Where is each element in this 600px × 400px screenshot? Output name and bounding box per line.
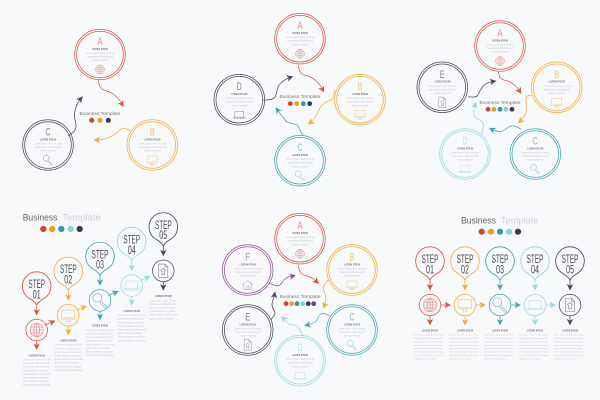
circle C: C	[298, 142, 303, 154]
circle A: A	[298, 20, 303, 32]
arrow A to B	[498, 72, 520, 91]
circle F	[222, 245, 273, 295]
step 05: sed do eiusmod tempor ut	[149, 306, 176, 310]
circle A: Lorem ipsum dolor sit amet	[286, 236, 314, 239]
step 03	[86, 242, 116, 357]
step 03: 03	[496, 264, 504, 276]
step 04: Lorem ipsum dolor sit amet consect	[519, 334, 549, 337]
step 04: nisi ut aliquip ex ea commodo cons	[519, 351, 548, 354]
step 02: Lorem ipsum dolor sit amet	[54, 344, 82, 347]
step 01: STEP	[422, 254, 439, 266]
step 02: quis nostrud exercitation	[54, 362, 80, 365]
step 05: 05	[159, 230, 167, 242]
colour dots	[288, 101, 312, 106]
circle B: Lorem ipsum dolor sit amet	[138, 142, 167, 146]
circle B	[531, 62, 582, 113]
circle A: consectetur adipiscing elit	[287, 40, 314, 43]
circle A	[275, 213, 325, 264]
title: Business	[461, 216, 496, 226]
circle A	[275, 13, 325, 64]
circle B: consectetur adipiscing elit	[544, 88, 570, 91]
step 04: STEP	[527, 254, 544, 266]
circle D: sed do eiusmod	[292, 366, 309, 368]
circle A: consectetur adipiscing elit	[87, 56, 114, 58]
step 01: LOREM IPSUM	[422, 330, 438, 332]
step 03: LOREM IPSUM	[92, 326, 108, 328]
circle F: Lorem ipsum dolor sit amet	[234, 268, 262, 270]
panel: three-step cycle	[23, 29, 178, 170]
step 01: magna aliqua ut enim minim	[23, 373, 52, 376]
circle C: consectetur adipiscing elit	[35, 146, 62, 149]
arrow F to A	[269, 276, 292, 286]
title	[23, 213, 101, 224]
circle A: A	[498, 28, 503, 40]
circle D	[214, 74, 265, 125]
circle C: Lorem ipsum dolor sit amet	[338, 328, 366, 330]
step 03: Lorem ipsum dolor sit amet	[86, 329, 114, 332]
step 04: 04	[531, 264, 539, 276]
circle C: LOREM IPSUM	[292, 155, 308, 157]
step 04: LOREM IPSUM	[124, 311, 140, 313]
step 05: quis nostrud exercitation	[149, 317, 175, 320]
title: Template	[62, 213, 101, 224]
circle C: sed do eiusmod	[344, 336, 361, 338]
step 02: voluptate velit esse cillum	[449, 357, 471, 360]
step 01: Lorem ipsum dolor sit amet consect	[414, 334, 444, 337]
step 03: nostrud exercitation ullamco labori	[484, 347, 513, 350]
step 04: aliqua ut enim ad minim veniam qu	[519, 344, 548, 347]
circle D	[440, 129, 490, 179]
arrow D to A	[263, 78, 290, 100]
step 04: LOREM IPSUM	[527, 330, 543, 332]
colour dots	[479, 229, 521, 235]
step 01: Lorem ipsum dolor sit amet	[23, 358, 51, 362]
circle C: C	[533, 136, 538, 148]
step 04: duis aute irure dolor in reprehende	[519, 354, 548, 357]
step 03: consectetur adipiscing elit	[86, 332, 113, 335]
panel: five-step cycle	[417, 21, 582, 179]
circle A: consectetur adipiscing elit	[487, 47, 514, 50]
arrow C to A	[68, 99, 80, 136]
step 05: nisi ut aliquip ex ea commodo cons	[554, 351, 583, 354]
title: Business Template	[280, 94, 321, 99]
step 02: sed do eiusmod tempor ut	[54, 351, 81, 354]
circle D: LOREM IPSUM	[231, 94, 247, 96]
step 02	[449, 247, 482, 360]
step 04: ullamco laboris nisi aliquip	[118, 336, 145, 339]
circle E	[417, 62, 468, 113]
step 01	[414, 247, 448, 360]
circle E: Lorem ipsum dolor sit amet	[428, 85, 457, 88]
step 05: voluptate velit esse cillum	[554, 357, 576, 360]
step 03: STEP	[92, 249, 109, 261]
circle D	[275, 335, 325, 386]
circle B: sed do eiusmod	[344, 276, 361, 278]
step 01: ullamco laboris nisi aliquip	[23, 380, 50, 383]
step 02: Lorem ipsum dolor sit amet consect	[449, 334, 479, 337]
step 04	[117, 227, 147, 342]
step 02: ex ea commodo consequat	[54, 369, 82, 372]
step 05: STEP	[155, 220, 172, 232]
step 04: sed do eiusmod tempor ut	[118, 321, 145, 324]
arrow A to B	[298, 265, 316, 282]
circle A: LOREM IPSUM	[292, 233, 308, 235]
circle C: C	[46, 126, 51, 138]
step 01: duis aute irure dolor in reprehende	[414, 354, 443, 357]
step 02: aliqua ut enim ad minim veniam qu	[449, 344, 478, 347]
step 02: nisi ut aliquip ex ea commodo cons	[449, 351, 478, 354]
arrow A to B	[298, 65, 322, 90]
step 05: Lorem ipsum dolor sit amet consect	[554, 334, 584, 337]
circle C: Lorem ipsum dolor sit amet	[286, 158, 314, 161]
circle D: D	[462, 136, 468, 148]
step 03: ullamco laboris nisi aliquip	[86, 350, 113, 353]
circle E: LOREM IPSUM	[240, 324, 256, 326]
circle B: B	[554, 69, 559, 81]
circle D: D	[298, 342, 303, 354]
colour dots	[486, 107, 514, 112]
circle C	[327, 305, 377, 355]
step 01: consectetur adipiscing elit	[23, 362, 49, 365]
step 03: incididunt ut labore et dolore magn	[484, 340, 513, 343]
circle D: Lorem ipsum dolor sit amet	[451, 152, 479, 154]
step 01: aliqua ut enim ad minim veniam qu	[414, 344, 443, 347]
step 04: quis nostrud exercitation	[118, 332, 143, 335]
circle A: sed do eiusmod	[292, 244, 309, 246]
step 04: adipiscing elit sed do eiusmod tem	[519, 337, 548, 340]
step 03: Lorem ipsum dolor sit amet consect	[484, 334, 514, 337]
arrow B to C	[97, 128, 131, 140]
circle A: consectetur adipiscing elit	[287, 240, 314, 243]
circle E	[222, 305, 273, 355]
step 01: incididunt labore et dolore	[23, 369, 50, 372]
panel: four-step cycle	[214, 13, 385, 186]
step 03: voluptate velit esse cillum	[484, 357, 506, 360]
circle D: consectetur adipiscing elit	[452, 155, 479, 158]
step 05: LOREM IPSUM	[562, 330, 578, 332]
circle B: LOREM IPSUM	[352, 94, 368, 96]
circle B: sed do eiusmod	[144, 151, 161, 153]
circle A: LOREM IPSUM	[492, 40, 508, 42]
circle B: sed do eiusmod	[549, 93, 566, 95]
step 02: STEP	[60, 264, 77, 276]
arrow B to C	[310, 90, 335, 122]
circle D: consectetur adipiscing elit	[226, 101, 253, 104]
circle B: consectetur adipiscing elit	[139, 146, 166, 149]
step 02: nostrud exercitation ullamco labori	[449, 347, 478, 350]
step 01: 01	[426, 264, 434, 276]
step 03: magna aliqua ut enim minim	[86, 343, 115, 346]
step 05: LOREM IPSUM	[155, 296, 171, 298]
circle A: A	[298, 220, 303, 232]
panel: horizontal five-step timeline	[414, 216, 584, 360]
step 04: magna aliqua ut enim minim	[118, 329, 147, 332]
circle C: Lorem ipsum dolor sit amet	[521, 152, 550, 154]
circle C: consectetur adipiscing elit	[522, 155, 549, 158]
circle A	[75, 29, 125, 80]
step 02: 02	[64, 275, 72, 287]
circle C: sed do eiusmod	[292, 166, 309, 168]
step 05: Lorem ipsum dolor sit amet	[149, 299, 177, 302]
step 01: nostrud exercitation ullamco labori	[414, 347, 443, 350]
circle C	[510, 129, 561, 179]
step 03: ex ea commodo consequat	[86, 354, 114, 357]
step 03: sed do eiusmod tempor ut	[86, 336, 113, 339]
arrow C to D	[492, 126, 522, 132]
step 04: Lorem ipsum dolor sit amet	[118, 314, 146, 317]
step 03: 03	[96, 260, 104, 272]
step 01	[22, 272, 52, 387]
circle A: sed do eiusmod	[292, 44, 309, 46]
step 02: duis aute irure dolor in reprehende	[449, 354, 478, 357]
circle A: sed do eiusmod	[492, 52, 509, 54]
step 04: consectetur adipiscing elit	[118, 318, 144, 321]
title: Template	[501, 216, 538, 226]
step 01: incididunt ut labore et dolore magn	[414, 340, 443, 343]
circle B	[127, 120, 178, 170]
circle B: sed do eiusmod	[352, 105, 369, 107]
step 02: consectetur adipiscing elit	[54, 347, 81, 350]
step 03: LOREM IPSUM	[492, 330, 508, 332]
circle B: consectetur adipiscing elit	[347, 101, 374, 104]
step 02: incididunt labore et dolore	[54, 355, 81, 358]
step 03: duis aute irure dolor in reprehende	[484, 354, 513, 357]
step 03: aliqua ut enim ad minim veniam qu	[484, 344, 513, 347]
circle E: Lorem ipsum dolor sit amet	[234, 328, 262, 330]
arrow B to C	[323, 280, 328, 306]
step 02: 02	[461, 264, 469, 276]
title: Business Template	[80, 111, 121, 116]
circle C: LOREM IPSUM	[527, 148, 543, 150]
step 05: 05	[566, 264, 574, 276]
circle C: LOREM IPSUM	[40, 139, 56, 141]
circle C: consectetur adipiscing elit	[287, 162, 314, 165]
step 05: magna aliqua ut enim minim	[149, 314, 178, 317]
circle B: B	[350, 252, 354, 264]
colour dots	[89, 118, 111, 123]
panel: six-step cycle	[222, 213, 377, 386]
step 01: adipiscing elit sed do eiusmod tem	[414, 337, 443, 340]
circle E: E	[245, 312, 250, 324]
circle F: F	[245, 252, 250, 264]
step 04: 04	[128, 245, 136, 257]
step 05: STEP	[562, 254, 579, 266]
step 05: incididunt ut labore et dolore magn	[554, 340, 583, 343]
circle A: Lorem ipsum dolor sit amet	[286, 36, 314, 39]
circle B	[335, 74, 385, 125]
step 01: 01	[33, 289, 41, 301]
step 01: ex ea commodo consequat	[23, 384, 51, 387]
step 04	[519, 247, 552, 360]
circle B	[327, 245, 377, 295]
circle E: sed do eiusmod	[240, 336, 257, 338]
circle A	[475, 21, 525, 71]
colour dots	[284, 301, 316, 306]
step 03: STEP	[492, 254, 509, 266]
step 05	[149, 213, 178, 320]
circle C: C	[350, 312, 355, 324]
circle F: sed do eiusmod	[240, 276, 257, 278]
step 02	[54, 257, 84, 372]
circle C	[275, 135, 325, 186]
step 03: quis nostrud exercitation	[86, 347, 112, 350]
circle D: consectetur adipiscing elit	[287, 362, 314, 365]
step 02: incididunt ut labore et dolore magn	[449, 340, 478, 343]
circle C	[23, 120, 73, 170]
step 04: nostrud exercitation ullamco labori	[519, 347, 548, 350]
circle E: LOREM IPSUM	[434, 82, 450, 84]
circle B: Lorem ipsum dolor sit amet	[543, 85, 571, 88]
circle B: LOREM IPSUM	[344, 264, 360, 266]
title: Business Template	[280, 294, 321, 299]
step 01: LOREM IPSUM	[29, 355, 45, 357]
circle C: consectetur adipiscing elit	[339, 331, 366, 334]
step 01: nisi ut aliquip ex ea commodo cons	[414, 351, 443, 354]
step 05: aliqua ut enim ad minim veniam qu	[554, 344, 583, 347]
arrow D to E	[474, 105, 484, 135]
circle B: B	[358, 81, 362, 93]
step 05: adipiscing elit sed do eiusmod tem	[554, 337, 583, 340]
circle A: sed do eiusmod	[92, 60, 109, 62]
title	[461, 216, 538, 226]
circle E: consectetur adipiscing elit	[235, 331, 261, 334]
circle D: Lorem ipsum dolor sit amet	[286, 358, 314, 361]
panel: rising five-step timeline	[22, 213, 178, 387]
step 05: incididunt labore et dolore	[149, 310, 176, 313]
step 02: STEP	[457, 254, 474, 266]
circle A: LOREM IPSUM	[92, 49, 108, 51]
step 04: ex ea commodo consequat	[118, 339, 146, 342]
circle E: consectetur adipiscing elit	[429, 88, 456, 91]
step 02: LOREM IPSUM	[457, 330, 473, 332]
arrow B to C	[520, 95, 532, 121]
circle E: sed do eiusmod	[434, 93, 451, 95]
circle D: Lorem ipsum dolor sit amet	[225, 97, 254, 100]
colour dots	[40, 226, 83, 232]
step 01: quis nostrud exercitation	[23, 376, 48, 380]
circle F: LOREM IPSUM	[240, 264, 256, 266]
title: Business Template	[480, 100, 521, 105]
circle A: Lorem ipsum dolor sit amet	[86, 52, 114, 55]
step 05	[554, 247, 584, 360]
circle D: sed do eiusmod	[231, 105, 248, 107]
step 04: incididunt ut labore et dolore magn	[519, 340, 548, 343]
circle C: Lorem ipsum dolor sit amet	[34, 142, 62, 146]
step 05: nostrud exercitation ullamco labori	[554, 347, 583, 350]
circle B: consectetur adipiscing elit	[339, 271, 366, 274]
circle B: Lorem ipsum dolor sit amet	[346, 97, 374, 100]
step 02: LOREM IPSUM	[60, 341, 76, 343]
circle F: consectetur adipiscing elit	[235, 271, 261, 274]
step 01: voluptate velit esse cillum	[414, 357, 436, 360]
arrow D to E	[284, 318, 303, 335]
circle B: LOREM IPSUM	[549, 82, 565, 84]
step 02: ullamco laboris nisi aliquip	[54, 365, 82, 368]
arrow C to D	[278, 110, 303, 135]
step 02: magna aliqua ut enim minim	[54, 358, 83, 361]
circle A: LOREM IPSUM	[292, 33, 308, 35]
circle D: D	[237, 81, 242, 93]
step 05: consectetur adipiscing elit	[149, 303, 176, 306]
circle D: sed do eiusmod	[457, 160, 474, 162]
step 01: sed do eiusmod tempor ut	[23, 366, 50, 369]
arrow E to A	[468, 82, 493, 97]
step 03: adipiscing elit sed do eiusmod tem	[484, 337, 513, 340]
circle C: sed do eiusmod	[40, 151, 57, 153]
step 04: incididunt labore et dolore	[118, 325, 145, 328]
circle D: LOREM IPSUM	[457, 148, 473, 150]
circle A: A	[98, 36, 103, 48]
step 03	[484, 247, 518, 360]
step 05: duis aute irure dolor in reprehende	[554, 354, 583, 357]
circle B: LOREM IPSUM	[144, 139, 160, 141]
circle E: E	[440, 69, 445, 81]
arrow A to B	[98, 80, 122, 104]
circle C: sed do eiusmod	[527, 160, 544, 162]
circle B: B	[150, 126, 155, 138]
arrow C to D	[308, 313, 330, 325]
step 03: nisi ut aliquip ex ea commodo cons	[484, 351, 513, 354]
title: Business	[23, 213, 58, 224]
step 04: voluptate velit esse cillum	[519, 357, 541, 360]
circle D: LOREM IPSUM	[292, 355, 308, 357]
circle C: LOREM IPSUM	[344, 324, 360, 326]
arrow E to F	[271, 295, 275, 320]
step 01: STEP	[28, 279, 45, 291]
step 04: STEP	[123, 235, 140, 247]
step 03: incididunt labore et dolore	[86, 340, 113, 343]
circle A: Lorem ipsum dolor sit amet	[486, 44, 514, 46]
step 02: adipiscing elit sed do eiusmod tem	[449, 337, 478, 340]
circle B: Lorem ipsum dolor sit amet	[338, 268, 366, 270]
